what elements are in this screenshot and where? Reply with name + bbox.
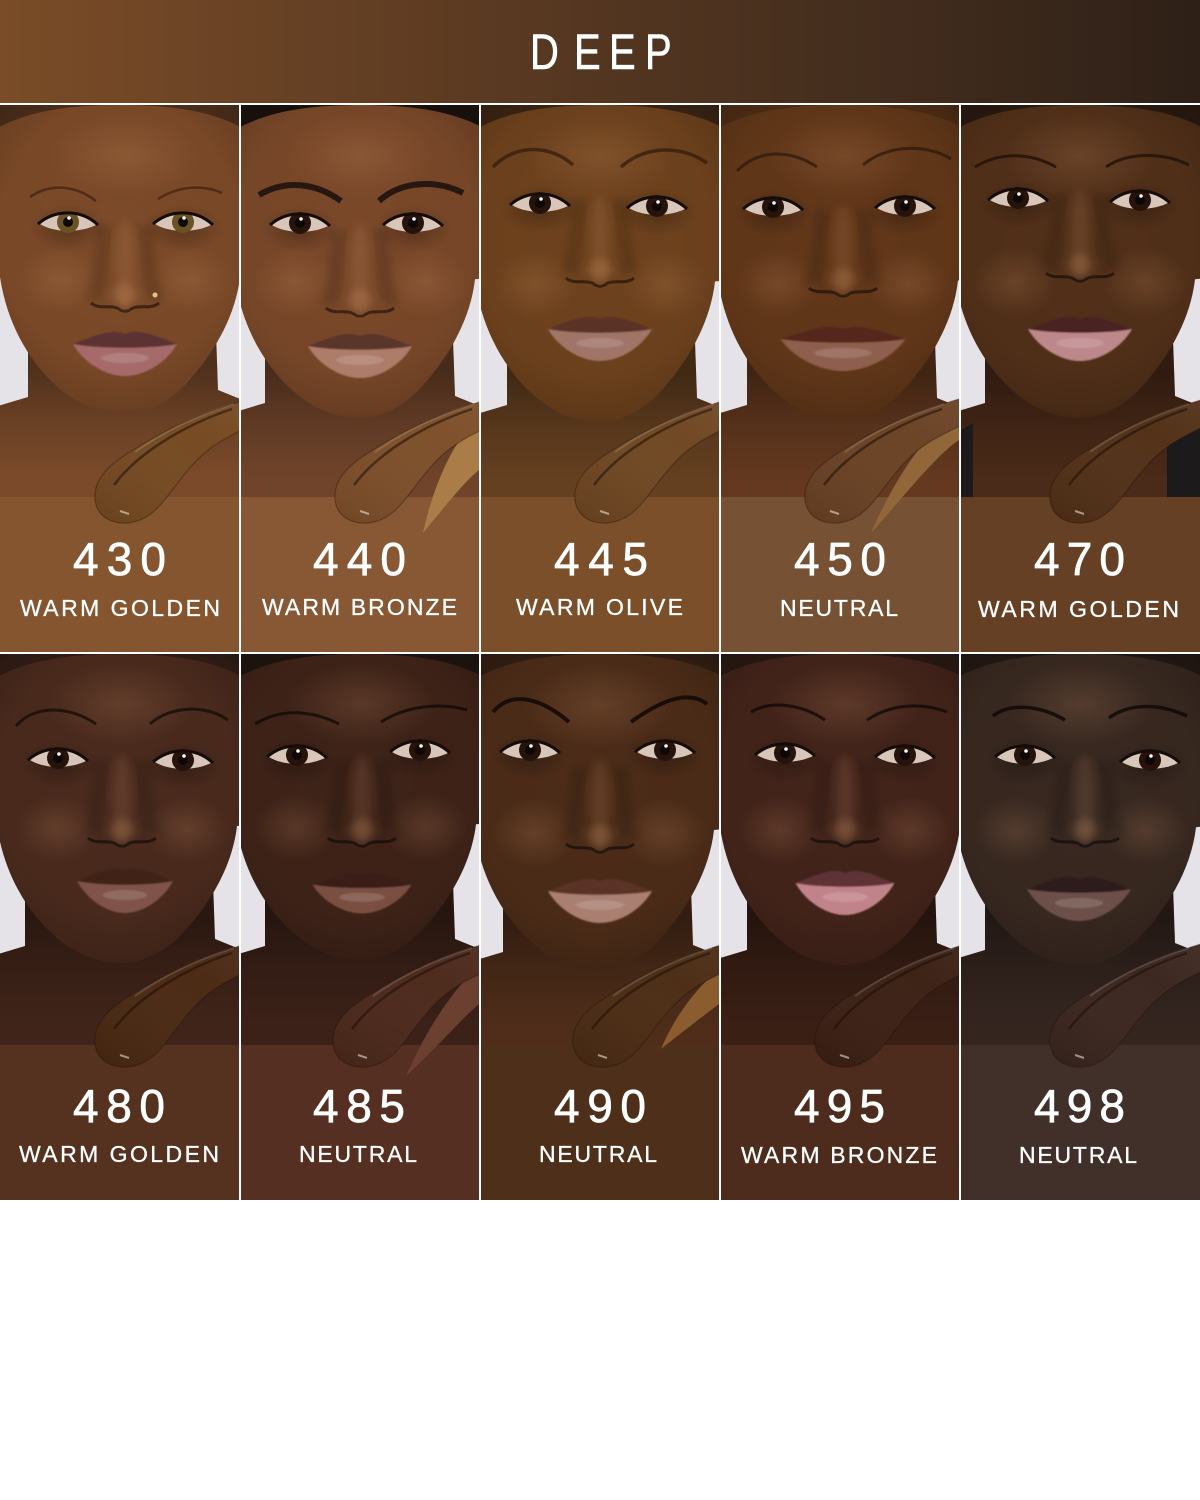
number 430: 430 [73, 533, 166, 585]
panel: shade 445 [455, 105, 765, 652]
number 440: 440 [313, 533, 406, 585]
portrait 470 [961, 105, 1200, 497]
title: DEEP [530, 24, 672, 80]
smear 450 [804, 398, 959, 532]
swatch 498 [961, 1045, 1200, 1200]
portrait 430 [0, 105, 239, 497]
panel: shade 495 [700, 654, 1005, 1200]
swatch 495 [721, 1045, 959, 1200]
swatch 470 [961, 497, 1200, 652]
smear 490 [572, 945, 719, 1068]
panel: shade 480 [0, 654, 285, 1200]
portrait 440 [241, 105, 479, 497]
panel: shade 440 [215, 105, 525, 652]
undertone 498: NEUTRAL [1019, 1142, 1137, 1168]
number 495: 495 [794, 1080, 885, 1132]
portrait 480 [0, 654, 239, 1045]
number 470: 470 [1034, 533, 1125, 585]
undertone 495: WARM BRONZE [741, 1142, 937, 1168]
panel: shade 485 [216, 654, 523, 1200]
smear 498 [1050, 944, 1200, 1068]
smear 445 [574, 402, 719, 524]
swatch 485 [241, 1045, 479, 1200]
portrait 485 [241, 654, 479, 1045]
number 498: 498 [1034, 1080, 1125, 1132]
number 445: 445 [554, 533, 648, 585]
title banner [0, 0, 1200, 103]
panel: shade 430 [0, 105, 285, 652]
smear 485 [332, 945, 479, 1076]
panel: shade 470 [935, 105, 1200, 652]
smear 430 [94, 402, 239, 524]
number 450: 450 [794, 533, 886, 585]
undertone 490: NEUTRAL [539, 1141, 657, 1167]
portrait 498 [961, 654, 1200, 1045]
swatch 450 [721, 497, 959, 652]
swatch 480 [0, 1045, 239, 1200]
smear 480 [94, 946, 239, 1068]
panel: shade 490 [454, 654, 763, 1200]
portrait 490 [481, 654, 719, 1045]
smear 440 [334, 402, 479, 533]
swatch 445 [481, 497, 719, 652]
portrait 445 [481, 105, 719, 497]
portrait 450 [721, 105, 959, 497]
swatch 430 [0, 497, 239, 652]
panel: shade 450 [698, 105, 995, 652]
panel: shade 498 [936, 654, 1200, 1200]
smear 470 [1049, 400, 1200, 524]
undertone 445: WARM OLIVE [516, 594, 683, 620]
swatch 490 [481, 1045, 719, 1200]
number 480: 480 [73, 1080, 165, 1132]
undertone 440: WARM BRONZE [262, 594, 457, 620]
undertone 430: WARM GOLDEN [20, 595, 220, 621]
number 485: 485 [313, 1080, 405, 1132]
swatch 440 [241, 497, 479, 652]
number 490: 490 [554, 1080, 646, 1132]
smear 495 [814, 946, 959, 1068]
undertone 480: WARM GOLDEN [19, 1141, 219, 1167]
undertone 450: NEUTRAL [780, 595, 898, 621]
portrait 495 [721, 654, 959, 1045]
undertone 485: NEUTRAL [299, 1141, 417, 1167]
undertone 470: WARM GOLDEN [978, 596, 1179, 622]
